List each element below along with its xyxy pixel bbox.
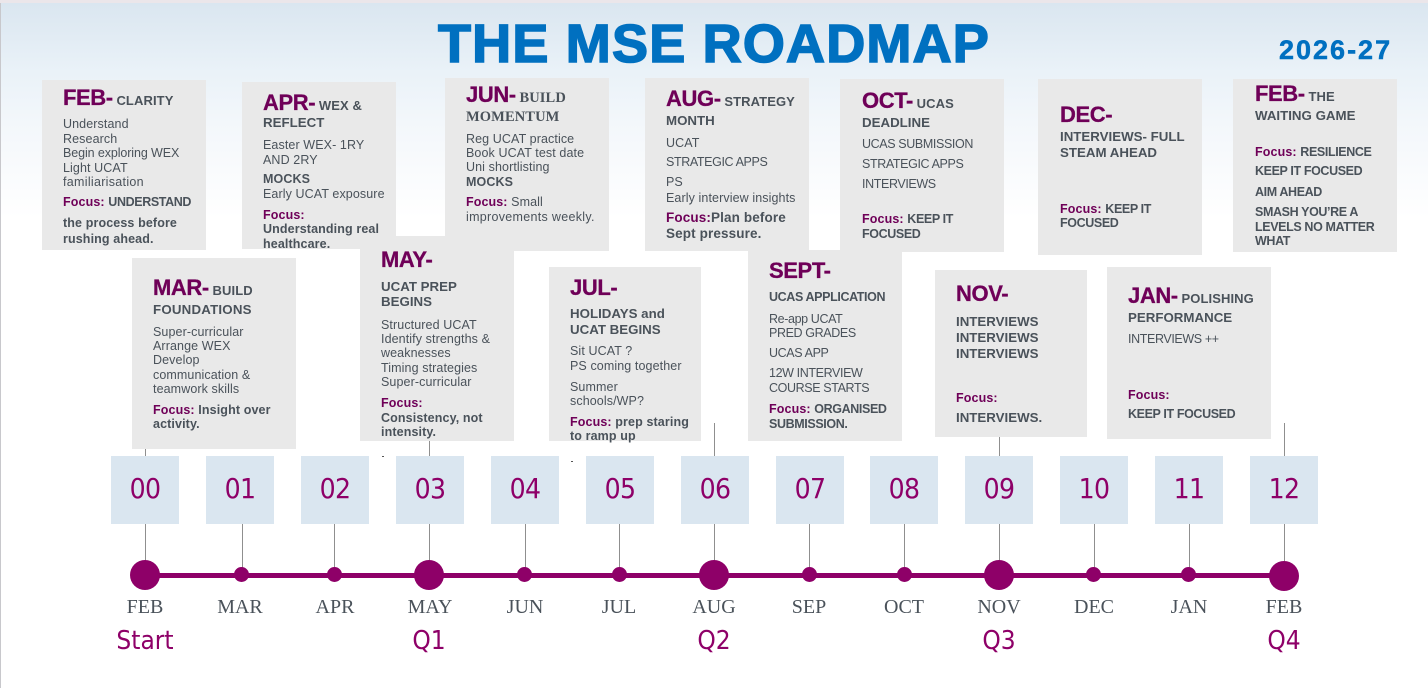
panel heading: FEB- THE [1255,81,1335,106]
panel: September: PRED GRADES [769,326,856,340]
panel: February waiting game: WHAT [1255,234,1290,248]
text: APR [316,596,354,618]
panel: February waiting game: SMASH YOU’RE A [1255,205,1358,219]
focus: Focus: prep staring [570,415,689,429]
text: 11 [1174,472,1204,505]
panel: August [645,78,809,251]
panel heading: AUG- STRATEGY [666,86,795,111]
panel: May: Consistency, not [381,411,483,425]
text: MAR [217,596,263,618]
panel: March: activity. [153,417,200,431]
text: JUL [602,596,636,618]
panel: November: INTERVIEWS [956,346,1039,361]
panel: April: Early UCAT exposure [263,187,385,201]
panel: April [242,82,396,249]
text: 10 [1079,472,1109,505]
panel: January [1107,267,1271,439]
panel: June: improvements weekly. [466,210,595,224]
text: AUG [692,596,736,618]
text: Q2 [697,626,731,656]
panel: September [748,250,902,441]
panel: March: Arrange WEX [153,339,231,353]
panel: April: healthcare. [263,237,330,251]
panel heading: APR- WEX & [263,90,362,115]
panel heading: FEB- CLARITY [63,85,173,110]
title: THE MSE ROADMAP [438,14,990,74]
timeline [130,524,1299,591]
panel: October: FOCUSED [862,227,920,241]
panel: August: Sept pressure. [666,226,761,241]
text: 01 [225,472,255,505]
panel: April: Understanding real [263,222,379,236]
month labels [127,596,1302,618]
panel: September: UCAS APP [769,346,828,360]
panel: July [549,267,701,441]
panel: May [360,236,514,441]
focus: Focus: UNDERSTAND [63,195,191,209]
panel: October [840,79,1004,252]
focus: Focus: RESILIENCE [1255,145,1372,159]
activities: INTERVIEWS ++ [1128,332,1219,346]
text: Q1 [412,626,446,656]
panel: June: MOCKS [466,175,513,189]
text: OCT [884,596,924,618]
panel: February clarity: Research [63,132,117,146]
panel: September: 12W INTERVIEW [769,366,862,380]
panel: October: INTERVIEWS [862,177,936,191]
panel: May: Identify strengths & [381,332,490,346]
text: 12 [1269,472,1299,505]
panel heading: MAY- [381,247,432,272]
year label: 2026-27 [1279,35,1392,65]
panel: July: PS coming together [570,359,682,373]
activities: Super-curricular [153,325,244,339]
text: 08 [889,472,919,505]
panel: May: BEGINS [381,294,432,309]
text: 00 [130,472,160,505]
panel: September: UCAS APPLICATION [769,290,885,304]
panel: December: INTERVIEWS- FULL [1060,129,1185,144]
panel: June: Book UCAT test date [466,146,584,160]
panel heading: JUL- [570,275,617,300]
panel: December [1038,79,1202,255]
panel: January: PERFORMANCE [1128,310,1232,325]
focus: Focus: KEEP IT [1060,202,1151,216]
panel: July: to ramp up [570,429,636,443]
panel: March: teamwork skills [153,382,239,396]
text: 05 [605,472,635,505]
panel: June: MOMENTUM [466,109,559,125]
panel: November: INTERVIEWS. [956,410,1042,425]
activities: Reg UCAT practice [466,132,574,146]
focus: Focus: ORGANISED [769,402,887,416]
text: 03 [415,472,445,505]
panel: May: UCAT PREP [381,279,457,294]
panel heading: SEPT- [769,258,831,283]
panel: November: INTERVIEWS [956,330,1039,345]
text: Start [116,626,174,656]
panel: August: PS [666,175,683,189]
activities: Understand [63,117,129,131]
text: 06 [700,472,730,505]
panel: June [445,78,609,251]
focus: Focus: [1128,388,1170,402]
panel: March: FOUNDATIONS [153,302,252,317]
activities: Re-app UCAT [769,312,842,326]
focus: Focus: [956,391,998,405]
text: NOV [977,596,1021,618]
panel: February waiting game: LEVELS NO MATTER [1255,220,1374,234]
panel heading: JUN- BUILD [466,82,566,107]
panel: March [132,258,296,449]
text: FEB [1266,596,1302,618]
panel: June: Uni shortlisting [466,160,550,174]
panel heading: JAN- POLISHING [1128,283,1254,308]
text: SEP [792,596,826,618]
panel: August: STRATEGIC APPS [666,155,767,169]
panel heading: DEC- [1060,102,1112,127]
panel: February clarity [42,80,206,250]
focus: Focus: [381,396,423,410]
panel: November [935,270,1087,437]
text: 04 [510,472,540,505]
panel: April: MOCKS [263,172,310,186]
panel: February clarity: rushing ahead. [63,232,154,246]
activities: UCAS SUBMISSION [862,137,973,151]
text: 09 [984,472,1014,505]
panel: September: SUBMISSION. [769,417,847,431]
panel: May: Super-curricular [381,375,472,389]
panel: March: Develop [153,353,200,367]
panel: February waiting game [1233,79,1397,252]
panel: July: UCAT BEGINS [570,322,661,337]
focus: Focus: Small [466,195,543,209]
text: JUN [507,596,543,618]
panel: August: Early interview insights [666,191,796,205]
text: JAN [1171,596,1207,618]
panel: July: HOLIDAYS and [570,306,665,321]
focus: Focus: [263,208,305,222]
panel: August: MONTH [666,113,715,128]
panel: December: FOCUSED [1060,216,1118,230]
panel: July: Summer [570,380,618,394]
text: Q3 [982,626,1016,656]
panel: February waiting game: WAITING GAME [1255,108,1355,123]
panel heading: MAR- BUILD [153,275,253,300]
text: 07 [795,472,825,505]
panel: February waiting game: KEEP IT FOCUSED [1255,164,1362,178]
focus: Focus: KEEP IT [862,212,953,226]
panel: February clarity: familiarisation [63,175,144,189]
panel heading: OCT- UCAS [862,88,954,113]
panel: November: INTERVIEWS [956,314,1039,329]
panel: February waiting game: AIM AHEAD [1255,185,1322,199]
quarter labels [116,626,1301,656]
text: FEB [127,596,163,618]
text: DEC [1074,596,1114,618]
text: 02 [320,472,350,505]
panel: March: communication & [153,368,250,382]
panel: February clarity: the process before [63,216,177,230]
text: MAY [408,596,452,618]
panel: September: COURSE STARTS [769,381,869,395]
panel: May: weaknesses [381,346,451,360]
panel: February clarity: Light UCAT [63,161,128,175]
focus: Focus: Insight over [153,403,271,417]
panel: July: schools/WP? [570,394,644,408]
panel: February clarity: Begin exploring WEX [63,146,179,160]
panel heading: NOV- [956,281,1008,306]
panel: October: DEADLINE [862,115,930,130]
panel: May: Timing strategies [381,361,477,375]
month number tiles [111,456,1318,524]
panel: October: STRATEGIC APPS [862,157,963,171]
activities: Easter WEX- 1RY [263,138,364,152]
text: Q4 [1267,626,1301,656]
activities: Sit UCAT ? [570,344,632,358]
panel: January: KEEP IT FOCUSED [1128,407,1235,421]
panel: December: STEAM AHEAD [1060,145,1157,160]
panel: April: REFLECT [263,115,324,130]
panel: May: intensity. [381,425,436,439]
activities: Structured UCAT [381,318,477,332]
focus: Focus:Plan before [666,210,786,225]
panel: April: AND 2RY [263,153,318,167]
activities: UCAT [666,136,700,150]
